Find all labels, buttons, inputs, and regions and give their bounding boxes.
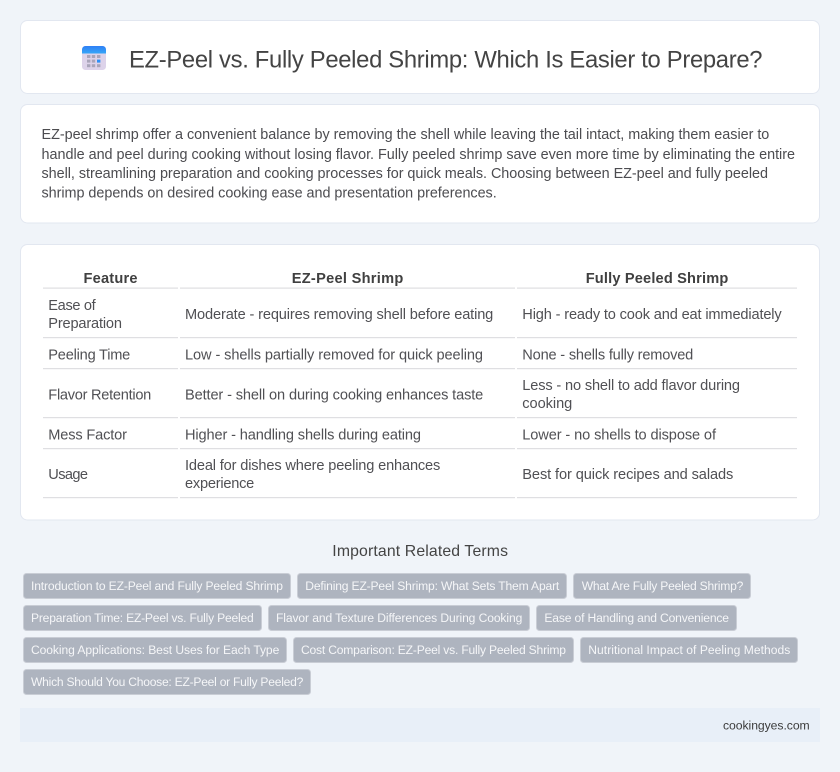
row: usage: experience — [185, 476, 254, 492]
row: flavor retention: Less - no shell to add flavor during — [522, 378, 740, 394]
row: peeling time — [48, 347, 693, 363]
title: EZ-Peel vs. Fully Peeled Shrimp: Which Is Easier to Prepare? — [129, 46, 762, 74]
panel: header — [20, 20, 820, 94]
tag — [24, 606, 262, 630]
footer bar — [20, 708, 820, 742]
tag: Ease of Handling and Convenience — [544, 611, 729, 625]
intro paragraph — [42, 127, 795, 202]
row: usage — [48, 458, 733, 492]
row: usage: Best for quick recipes and salads — [522, 467, 733, 483]
row: ease of preparation: High - ready to cook and eat immediately — [522, 307, 782, 323]
row: mess factor: Higher - handling shells during eating — [185, 427, 421, 443]
row: mess factor — [48, 427, 717, 443]
footer source: cookingyes.com — [723, 718, 810, 732]
related term tags — [24, 574, 798, 694]
tag: Cost Comparison: EZ-Peel vs. Fully Peeled Shrimp — [301, 643, 566, 657]
tag: Defining EZ-Peel Shrimp: What Sets Them Apart — [305, 579, 560, 593]
row: usage: Ideal for dishes where peeling enhances — [185, 458, 440, 474]
row: peeling time: None - shells fully removed — [522, 347, 693, 363]
tag — [580, 638, 798, 662]
row: mess factor: Lower - no shells to dispose of — [522, 427, 717, 443]
heading: important related terms: Important Related Terms — [332, 543, 508, 560]
icon: calendar — [82, 46, 106, 70]
panel: intro text — [20, 104, 820, 223]
table header row: EZ-Peel Shrimp — [292, 271, 403, 287]
row: flavor retention: Better - shell on during cooking enhances taste — [185, 387, 483, 403]
row: mess factor: Mess Factor — [48, 427, 127, 443]
tag — [24, 670, 310, 694]
intro paragraph: handle and peel during cooking without losing flavor. Fully peeled shrimp save even more time by eliminating the entire — [42, 147, 795, 163]
intro paragraph: EZ-peel shrimp offer a convenient balance by removing the shell while leaving the tail intact, making them easier to — [42, 127, 769, 143]
intro paragraph: shell, streamlining preparation and cooking processes for quick meals. Choosing between EZ-peel and fully peeled — [42, 166, 768, 182]
row: flavor retention: cooking — [522, 396, 572, 412]
table header row: Feature — [84, 271, 138, 287]
tag: Flavor and Texture Differences During Cooking — [276, 611, 522, 625]
tag — [268, 606, 530, 630]
table header row: Fully Peeled Shrimp — [586, 271, 728, 287]
row: ease of preparation: Moderate - requires removing shell before eating — [185, 307, 493, 323]
tag — [294, 638, 574, 662]
tag: Which Should You Choose: EZ-Peel or Fully Peeled? — [31, 675, 304, 689]
tag — [24, 638, 286, 662]
panel: comparison table — [20, 244, 820, 520]
tag — [24, 574, 290, 598]
intro paragraph: shrimp depends on desired cooking ease and presentation preferences. — [42, 186, 497, 202]
tag — [536, 606, 736, 630]
tag: Preparation Time: EZ-Peel vs. Fully Peeled — [31, 611, 254, 625]
row: flavor retention — [48, 378, 740, 412]
row: flavor retention: Flavor Retention — [48, 387, 151, 403]
row: ease of preparation — [48, 298, 782, 332]
tag: Nutritional Impact of Peeling Methods — [588, 643, 790, 657]
row: ease of preparation: Preparation — [48, 316, 122, 332]
tag — [574, 574, 750, 598]
tag — [298, 574, 566, 598]
tag: What Are Fully Peeled Shrimp? — [582, 579, 744, 593]
row: usage: Usage — [48, 467, 88, 483]
table header row — [84, 271, 728, 287]
tag: Cooking Applications: Best Uses for Each Type — [31, 643, 280, 657]
row: ease of preparation: Ease of — [48, 298, 97, 314]
row: peeling time: Peeling Time — [48, 347, 130, 363]
row: peeling time: Low - shells partially removed for quick peeling — [185, 347, 483, 363]
tag: Introduction to EZ-Peel and Fully Peeled Shrimp — [31, 579, 283, 593]
